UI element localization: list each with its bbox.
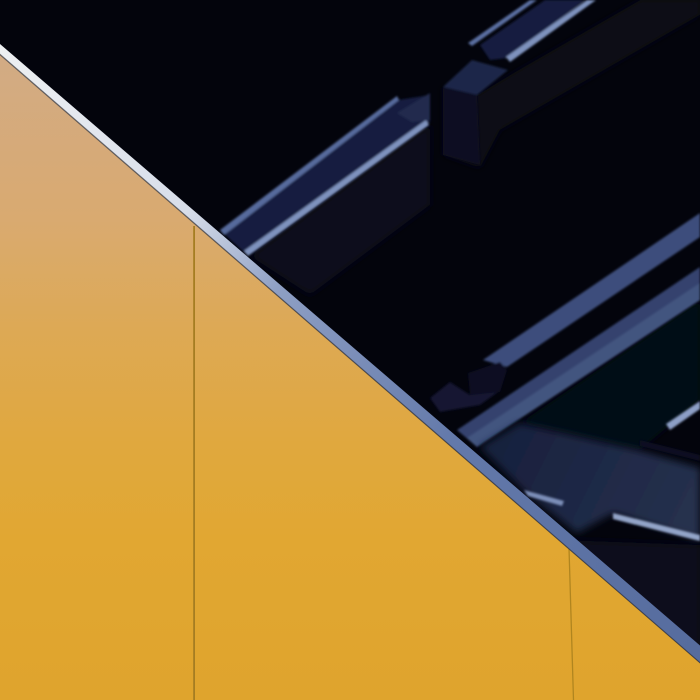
panel seams: [193, 226, 573, 700]
bracket: [443, 60, 508, 165]
bright floor strips: [524, 401, 700, 541]
dim structure panels: [250, 0, 700, 660]
upper steel beams: [220, 0, 596, 256]
lower steel beams: [430, 213, 700, 447]
concrete floor: [480, 423, 700, 540]
